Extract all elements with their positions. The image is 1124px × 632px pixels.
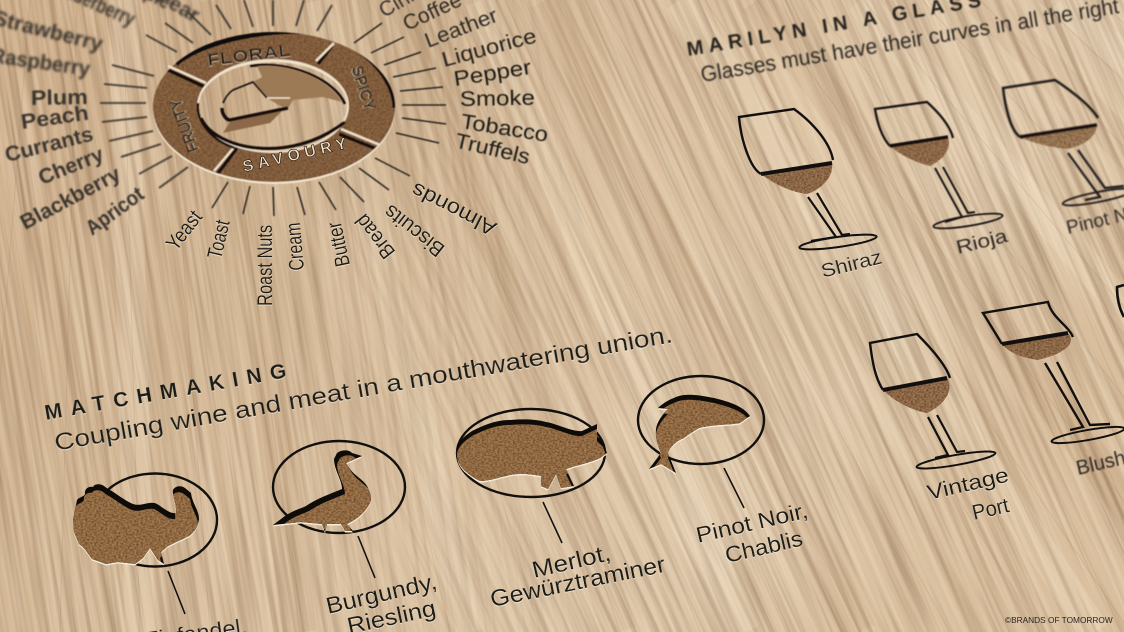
flavour labels: bottom side: Almonds	[408, 178, 500, 240]
wheel label: floral: FLORAL	[206, 41, 292, 70]
wheel label: savoury: SAVOURY	[241, 135, 349, 176]
glass: Rioja	[875, 102, 1010, 259]
flavour labels: left side: Currants	[3, 123, 96, 167]
label: Merlot, Gewurztraminer: Merlot,	[529, 540, 613, 583]
flavour labels: bottom side: Biscuits	[380, 200, 449, 261]
heading: Marilyn in a glass	[685, 0, 1124, 87]
flavour labels: left side: Apricot	[81, 183, 148, 240]
leader line: pig	[543, 502, 562, 543]
label: Shiraz: Shiraz	[819, 247, 884, 283]
icon: pig	[457, 409, 607, 497]
icon: fish	[638, 376, 764, 478]
copyright: ©BRANDS OF TOMORROW	[1005, 615, 1113, 625]
flavour labels: right side: Tobacco	[459, 110, 550, 147]
icon: goose	[273, 441, 405, 537]
heading: Matchmaking: MATCHMAKING	[43, 360, 288, 425]
flavour labels: bottom side: Toast	[203, 218, 235, 261]
label: Vintage Port	[925, 464, 1011, 525]
wheel inner ring outline	[198, 60, 348, 152]
flavour labels: left side: Cherry	[35, 143, 107, 190]
flavour labels: left side: Peach	[19, 102, 90, 134]
flavour labels: bottom side: Yeast	[162, 206, 207, 255]
wheel label: spicy: SPICY	[347, 64, 378, 113]
flavour labels: right side: Liquorice	[439, 25, 539, 72]
flavour labels: right side: Truffels	[453, 129, 532, 169]
leader line: fish	[724, 468, 744, 508]
panel: glasses	[739, 80, 1124, 525]
glass: Shiraz	[739, 109, 884, 283]
label: Pinot Noir, Chablis	[694, 498, 810, 568]
flavour labels: right side	[375, 0, 550, 169]
glass: Pinot Noir	[1003, 80, 1124, 239]
icon: turkey	[72, 474, 217, 570]
label: Vintage Port: Vintage	[925, 464, 1011, 505]
flavour labels: top left, blurred	[0, 0, 203, 81]
panel: flavour wheel	[153, 32, 395, 184]
glass: Blush	[983, 302, 1124, 480]
subheading: Matchmaking: Coupling wine and meat in a mouthwatering union.	[52, 321, 675, 457]
flavour labels: bottom side: Roast Nuts	[254, 225, 277, 306]
flavour labels: right side: Leather	[422, 4, 501, 53]
leader line: turkey	[168, 571, 185, 614]
leader line: goose	[358, 536, 375, 578]
label: Burgundy, Riesling	[323, 568, 439, 632]
label: Vintage Port: Port	[970, 494, 1011, 525]
label: Burgundy, Riesling: Burgundy,	[323, 568, 439, 619]
flavour ticks	[100, 0, 446, 216]
flavour labels: right side: Pepper	[452, 56, 533, 91]
icon: wine glass and centre cutout	[222, 65, 342, 133]
glass: cropped right edge	[1117, 285, 1124, 317]
flavour labels: bottom side: Bread	[351, 210, 400, 263]
flavour labels: left side: Blackberry	[17, 162, 125, 234]
label: Merlot, Gewurztraminer: Gewürztraminer	[488, 551, 668, 612]
flavour labels: bottom side	[162, 178, 500, 306]
flavour labels: left side	[3, 86, 148, 240]
glass: Vintage Port	[870, 334, 1011, 525]
flavour labels: left side: Plum	[31, 86, 88, 110]
flavour wheel ring	[153, 32, 395, 184]
flavour labels: bottom side: Cream	[282, 222, 309, 272]
label: Rioja: Rioja	[954, 226, 1010, 259]
label: Pinot Noir, Chablis: Chablis	[723, 526, 805, 568]
panel: pairings	[72, 376, 810, 632]
flavour labels: bottom side: Butter	[323, 220, 355, 269]
flavour labels: right side: Smoke	[460, 87, 535, 111]
wheel label: fruity: FRUITY	[168, 96, 203, 154]
label: Pinot Noir, Chablis: Pinot Noir,	[694, 498, 810, 548]
